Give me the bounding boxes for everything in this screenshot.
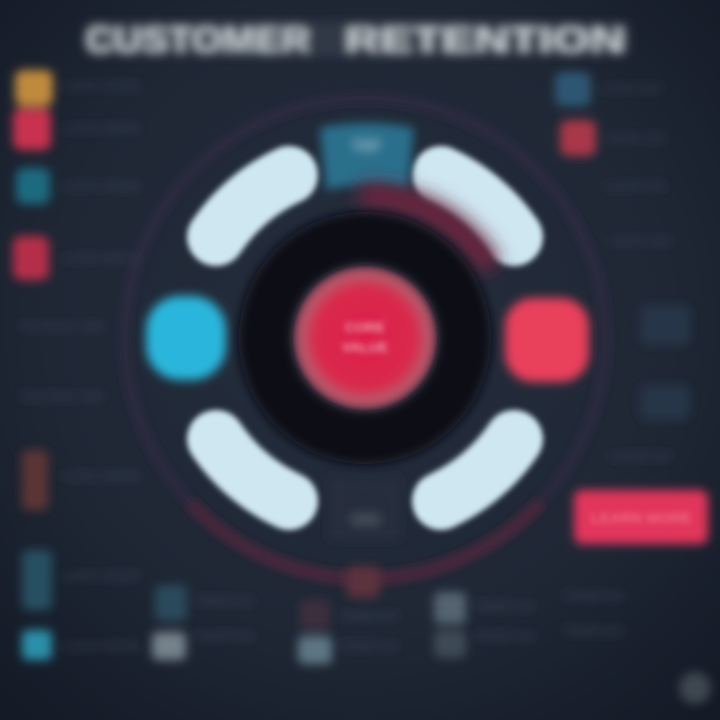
bottom row text xyxy=(195,588,623,653)
bottom row text: Detail text xyxy=(340,608,398,623)
segment: left cyan xyxy=(146,296,226,380)
segment: bottom left xyxy=(216,439,289,501)
segment: top teal: TOP xyxy=(353,138,380,153)
title: RETENTION xyxy=(345,19,625,60)
diagram xyxy=(125,98,605,598)
segment: top right xyxy=(441,175,514,237)
segment: bottom right xyxy=(441,439,514,501)
center hub: CORE xyxy=(345,319,385,335)
segment: top left xyxy=(216,175,289,237)
title: CUSTOMER xyxy=(85,19,310,60)
lower ring accent xyxy=(190,503,540,579)
left column icons xyxy=(13,70,53,660)
segment: right red xyxy=(505,298,589,382)
bottom row text: Detail text xyxy=(565,588,623,603)
right column text lines: Lorem text xyxy=(610,448,672,463)
left column text lines: Lorem details xyxy=(62,250,141,265)
left column text lines: Lorem details xyxy=(62,178,141,193)
right column icons xyxy=(555,72,711,704)
center hub xyxy=(293,266,437,410)
bottom row text: Detail text xyxy=(476,628,534,643)
bottom row text: Detail text xyxy=(565,623,623,638)
left column text lines: Summary note xyxy=(20,388,105,403)
right column text lines xyxy=(600,80,672,463)
segment: bottom dark: END xyxy=(352,512,380,527)
bottom marker xyxy=(346,566,380,598)
left column text lines: Lorem details xyxy=(62,78,141,93)
callout button xyxy=(574,490,708,544)
black ring xyxy=(265,238,465,438)
left column text lines: Lorem details xyxy=(62,568,141,583)
bottom row text: Detail text xyxy=(195,593,253,608)
center hub: VALUE xyxy=(342,339,388,355)
right column text lines: Lorem text xyxy=(605,178,667,193)
right column text lines: Lorem text xyxy=(610,233,672,248)
title xyxy=(85,19,630,60)
red arc xyxy=(360,196,490,268)
right column text lines: Lorem text xyxy=(600,80,662,95)
left column text lines: Summary note xyxy=(20,318,105,333)
bottom row text: Detail text xyxy=(340,638,398,653)
bottom row text: Detail text xyxy=(195,628,253,643)
segment: top teal xyxy=(320,123,414,190)
left column text lines: Lorem details xyxy=(62,468,141,483)
segment: bottom dark xyxy=(330,476,400,540)
right column text lines: Lorem text xyxy=(604,130,666,145)
outer ring xyxy=(125,98,605,578)
left column text lines: Lorem details xyxy=(62,638,141,653)
bottom row icons xyxy=(152,585,466,664)
callout button: LEARN MORE xyxy=(591,510,691,527)
left column text lines: Lorem details xyxy=(62,120,141,135)
bottom row text: Detail text xyxy=(476,598,534,613)
left column text lines xyxy=(20,78,141,653)
